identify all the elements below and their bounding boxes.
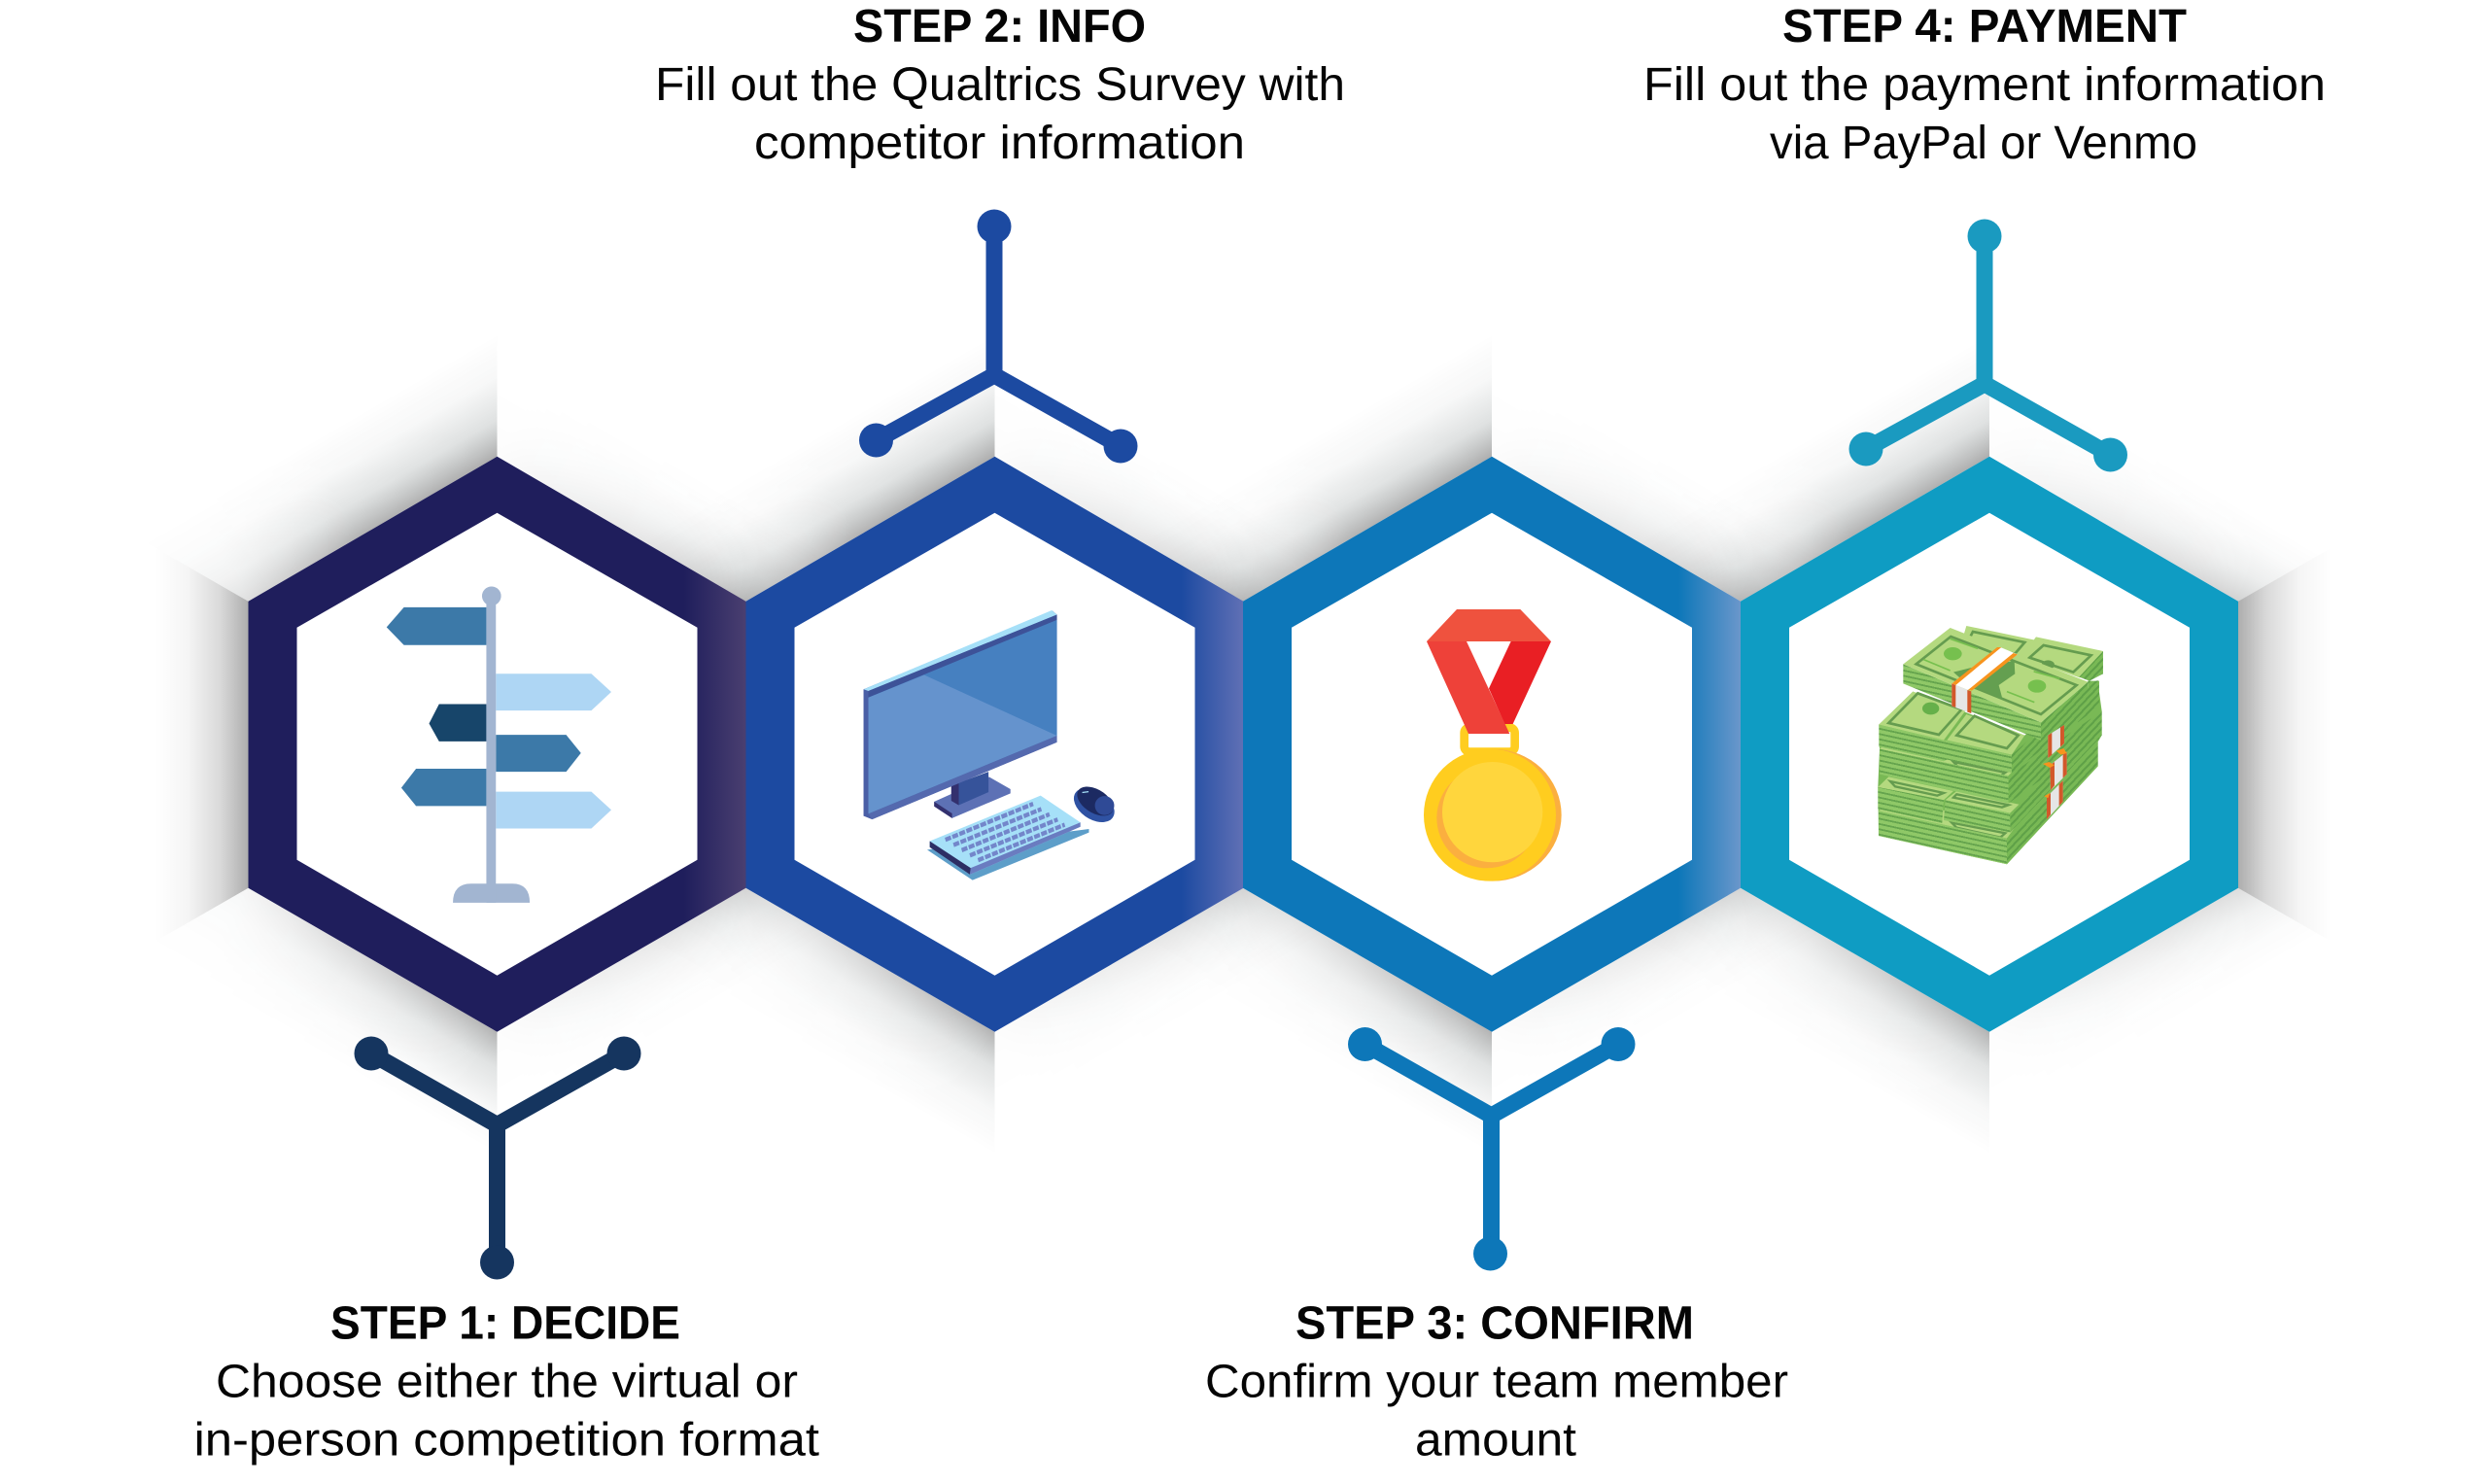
connector: step 2: [859, 210, 1137, 463]
text block: step 3: amount: [1415, 1415, 1576, 1466]
connector: step 3: [1348, 1027, 1635, 1271]
text block: step 1: in-person competition format: [194, 1415, 819, 1466]
text block: step 3: STEP 3: CONFIRM: [1295, 1298, 1694, 1349]
hexagon shadow: step 2: [702, 385, 1288, 1112]
text block: step 1: [194, 1298, 819, 1466]
hexagon shadow: step 1: [183, 375, 791, 1112]
text block: step 4: [1643, 1, 2326, 169]
text block: step 2: STEP 2: INFO: [853, 1, 1146, 52]
hexagon: step 4: [1741, 457, 2238, 1032]
icon: medal: [1424, 609, 1562, 881]
text block: step 3: [1205, 1298, 1788, 1466]
text block: step 2: Fill out the Qualtrics Survey with: [655, 59, 1345, 111]
hexagon: step 2: [746, 457, 1244, 1032]
text block: step 2: competitor information: [754, 118, 1245, 169]
icon: signpost: [387, 586, 611, 903]
icon: computer: [864, 610, 1119, 880]
text block: step 4: Fill out the payment information: [1643, 59, 2326, 111]
text block: step 1: STEP 1: DECIDE: [330, 1298, 680, 1349]
connector: step 4: [1848, 220, 2127, 472]
hexagon shadow: step 4: [1696, 394, 2304, 1114]
text block: step 4: STEP 4: PAYMENT: [1782, 1, 2187, 52]
text block: step 2: [655, 1, 1345, 169]
hexagon: step 1: [249, 457, 746, 1032]
text block: step 1: Choose either the virtual or: [216, 1357, 798, 1407]
icon: stacks of money: [1878, 626, 2103, 864]
hexagon shadow: step 3: [1199, 376, 1787, 1106]
connector: step 1: [354, 1036, 641, 1279]
hexagon: step 3: [1243, 457, 1741, 1032]
text block: step 4: via PayPal or Venmo: [1770, 118, 2197, 169]
text block: step 3: Confirm your team member: [1205, 1357, 1788, 1407]
